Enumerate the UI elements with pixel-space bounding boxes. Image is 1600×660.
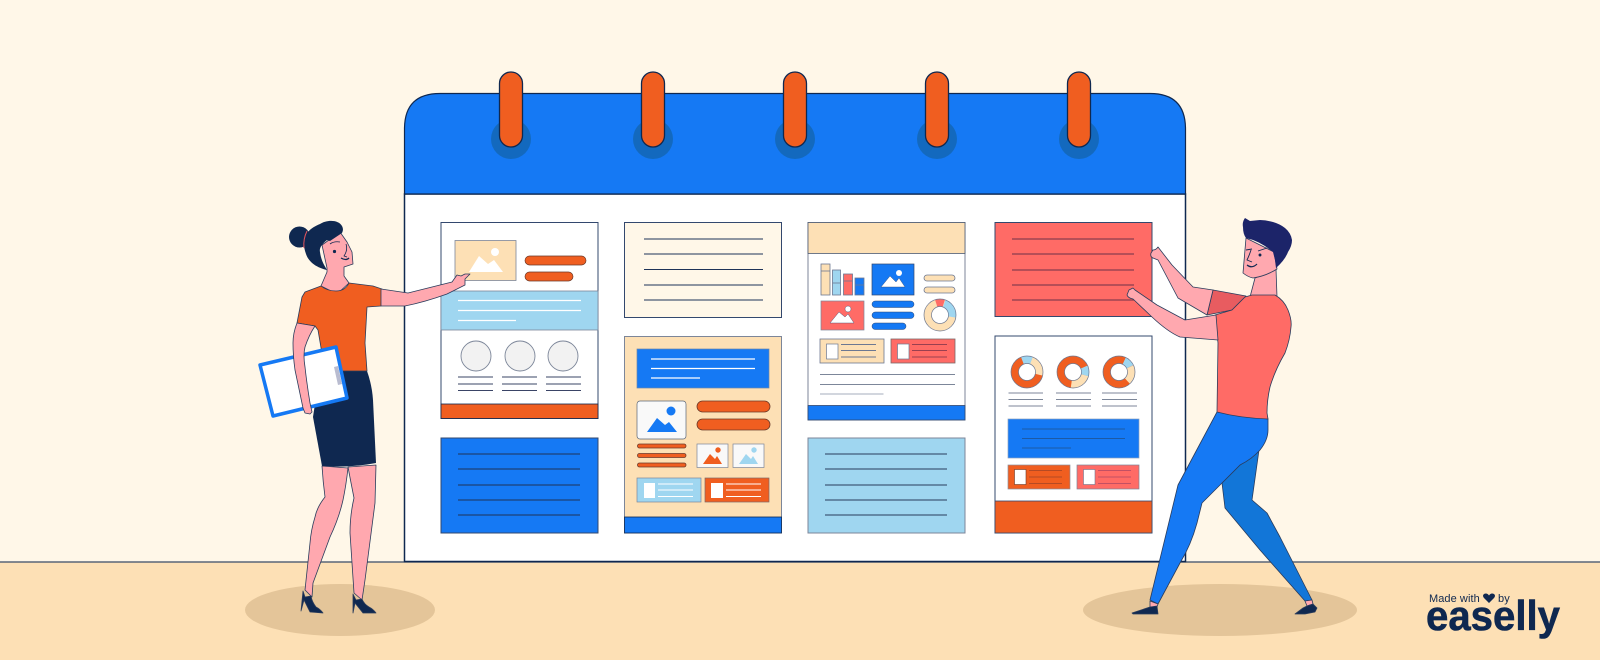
clipboard [260, 347, 347, 416]
hair [289, 221, 343, 270]
band lines [458, 300, 581, 320]
orange pills [525, 256, 586, 281]
front leg [1150, 412, 1268, 604]
tagline: Made with [1429, 593, 1480, 605]
face details [330, 242, 349, 260]
image tile [637, 401, 686, 439]
small image blue [733, 444, 764, 468]
calendar header [404, 94, 1186, 194]
donut 1 [1011, 356, 1043, 388]
text lines [820, 374, 955, 394]
feet [1132, 600, 1317, 614]
hair [1243, 218, 1292, 268]
card: donuts infographic [995, 336, 1152, 533]
man presenter [1127, 218, 1317, 614]
card: blue text [441, 438, 598, 533]
footer strip [624, 517, 782, 533]
small image orange [697, 444, 728, 468]
wordmark: easelly [1426, 592, 1561, 639]
footer strip [808, 406, 965, 420]
binding rings [491, 72, 1099, 159]
floor shadow: man [1083, 584, 1357, 636]
beige pills [924, 275, 955, 293]
calendar body [404, 194, 1186, 562]
neck and face [321, 232, 353, 294]
card: cream text [624, 222, 782, 318]
face details [1246, 248, 1267, 267]
tile beige [820, 339, 884, 363]
tile red [891, 339, 955, 363]
hair tie [304, 231, 307, 248]
footer strip [995, 501, 1152, 533]
tile red [1077, 465, 1139, 489]
heart [1483, 594, 1495, 603]
header block [637, 349, 769, 388]
red shirt [1215, 295, 1291, 419]
image red [821, 301, 864, 330]
pointing arm [381, 274, 470, 306]
shoes [301, 591, 376, 613]
floor [0, 562, 1600, 660]
card: red text [995, 222, 1152, 316]
woman presenter [260, 221, 470, 613]
card: beige infographic [624, 336, 782, 533]
image tile [455, 240, 516, 280]
donut 3 [1103, 356, 1135, 388]
image blue [872, 264, 914, 295]
header band [808, 222, 965, 254]
card: charts infographic [808, 222, 965, 420]
back leg [1222, 450, 1312, 601]
lower arm [1127, 288, 1218, 340]
tile blue [637, 478, 701, 502]
text lines [458, 377, 581, 390]
legs [305, 465, 376, 600]
donut chart [924, 299, 956, 331]
blue band [441, 291, 598, 330]
calendar [404, 72, 1186, 562]
orange pills [638, 401, 770, 467]
card: infographic with circles [441, 222, 598, 418]
holding arm [293, 323, 315, 414]
skirt [313, 371, 376, 467]
grey circles [461, 341, 578, 371]
face [1243, 238, 1277, 278]
card: light blue text [808, 438, 965, 533]
tile orange [1008, 465, 1070, 489]
text lines [1008, 393, 1137, 406]
floor shadow: woman [245, 584, 435, 636]
bar chart [821, 264, 864, 295]
blue pills [872, 301, 914, 330]
upper arm [1151, 247, 1213, 315]
footer strip [441, 404, 598, 418]
logo: Made with love by easelly [1426, 592, 1561, 639]
orange shirt [297, 283, 382, 371]
blue block [1008, 419, 1139, 458]
tile orange [705, 478, 769, 502]
back sleeve [1207, 290, 1246, 315]
tagline end: by [1498, 593, 1510, 605]
neck [1250, 269, 1277, 297]
donut 2 [1057, 356, 1089, 388]
